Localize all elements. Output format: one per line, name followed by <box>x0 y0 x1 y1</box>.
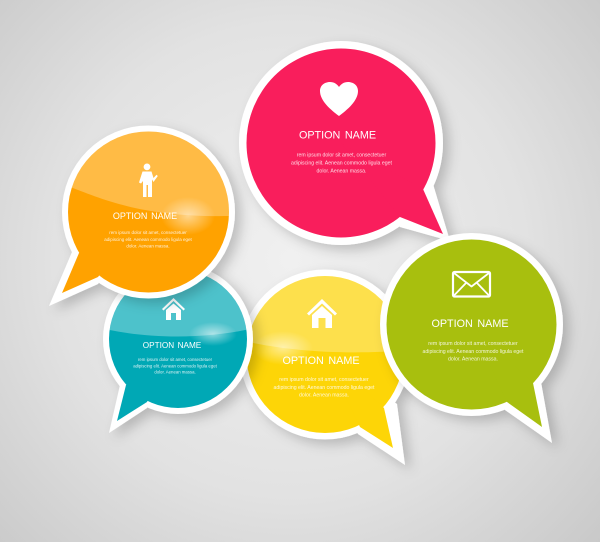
heading: teal option name: OPTION NAME <box>143 341 202 350</box>
text block: teal body: rem ipsum dolor sit amet, consectetuer <box>138 357 213 362</box>
text block: orange body: rem ipsum dolor sit amet, consectetuer <box>109 230 187 235</box>
text block: orange body: adipiscing elit. Aenean commodo ligula eget <box>104 237 193 242</box>
text block: green body: dolor. Aenean massa. <box>448 356 498 362</box>
green bubble white border <box>380 233 563 443</box>
icon: person <box>139 164 158 197</box>
heading: orange option name: OPTION NAME <box>113 211 177 221</box>
text block: green body: rem ipsum dolor sit amet, consectetuer <box>428 341 518 347</box>
teal bubble fill <box>109 270 247 421</box>
heading: yellow option name: OPTION NAME <box>282 355 360 367</box>
yellow bubble fill <box>246 276 404 448</box>
icon: heart <box>320 82 358 116</box>
text block: teal body: dolor. Aenean massa. <box>154 370 196 374</box>
panel: green bubble <box>380 233 563 443</box>
icon: house <box>162 298 185 320</box>
text block: pink body <box>291 152 393 174</box>
orange gloss <box>72 132 229 234</box>
yellow bubble white border <box>240 270 410 465</box>
pink bubble fill <box>246 48 443 238</box>
text block: green body <box>423 341 524 362</box>
text block: pink body: adipiscing elit. Aenean commodo ligula eget <box>291 160 393 166</box>
icon: house <box>307 299 337 328</box>
text block: pink body: dolor. Aenean massa. <box>317 168 366 174</box>
text block: teal body: adipiscing elit. Aenean commodo ligula eget <box>133 364 218 368</box>
text block: yellow body <box>274 377 375 398</box>
heading: green option name: OPTION NAME <box>431 318 509 330</box>
panel: orange bubble <box>49 125 235 306</box>
text block: yellow body: adipiscing elit. Aenean commodo ligula eget <box>274 385 375 391</box>
text block: yellow body: dolor. Aenean massa. <box>299 392 349 398</box>
orange bubble white border <box>49 126 235 306</box>
text block: orange body: dolor. Aenean massa. <box>126 244 170 248</box>
green bubble fill <box>386 240 556 427</box>
teal gloss <box>110 276 246 346</box>
teal bubble white border <box>103 264 253 433</box>
text block: teal body <box>133 357 218 374</box>
orange bubble fill <box>62 132 229 293</box>
text block: green body: adipiscing elit. Aenean commodo ligula eget <box>423 349 524 355</box>
pink bubble white border <box>239 41 450 245</box>
text block: orange body <box>104 230 193 248</box>
icon: envelope <box>453 272 490 296</box>
panel: yellow bubble <box>240 270 410 465</box>
yellow gloss <box>252 276 384 364</box>
heading: pink option name: OPTION NAME <box>299 130 376 142</box>
panel: teal bubble <box>103 264 253 433</box>
text block: pink body: rem ipsum dolor sit amet, consectetuer <box>297 152 386 158</box>
text block: yellow body: rem ipsum dolor sit amet, consectetuer <box>279 377 369 383</box>
panel: pink bubble <box>239 41 450 245</box>
